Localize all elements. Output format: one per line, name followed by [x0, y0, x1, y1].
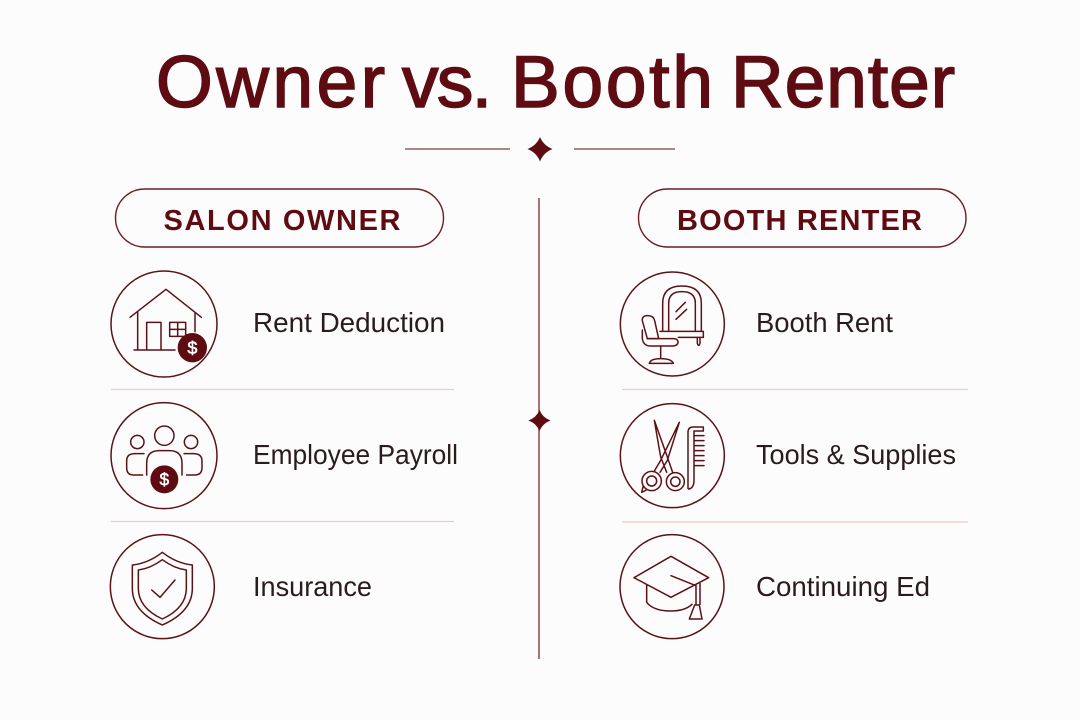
label: insurance: Insurance — [253, 571, 372, 602]
title — [156, 42, 955, 123]
heading: booth renter — [638, 189, 966, 247]
icon: graduation cap — [620, 535, 724, 639]
label: booth rent: Booth Rent — [756, 307, 893, 338]
icon: house with dollar: $ — [187, 338, 197, 358]
label: employee payroll: Employee Payroll — [253, 439, 458, 470]
panel: salon owner — [110, 189, 458, 639]
center divider — [528, 198, 550, 659]
label: continuing ed: Continuing Ed — [756, 571, 930, 602]
heading: booth renter: BOOTH RENTER — [677, 205, 922, 237]
icon: house with dollar — [111, 271, 217, 377]
title ornament — [405, 137, 675, 162]
label: tools and supplies: Tools & Supplies — [756, 439, 956, 470]
heading: salon owner — [116, 189, 444, 247]
panel: booth renter — [620, 189, 968, 639]
icon: scissors and comb — [620, 404, 724, 508]
heading: salon owner: SALON OWNER — [164, 205, 401, 237]
title: Owner — [156, 42, 385, 123]
icon: employees with dollar — [111, 403, 217, 509]
title: Renter — [731, 42, 955, 123]
icon: salon chair and mirror — [620, 272, 724, 376]
title: vs. — [402, 42, 492, 123]
label: rent deduction: Rent Deduction — [253, 307, 445, 338]
icon: employees with dollar: $ — [160, 469, 170, 489]
title: Booth — [511, 42, 713, 123]
icon: shield with check — [110, 535, 214, 639]
